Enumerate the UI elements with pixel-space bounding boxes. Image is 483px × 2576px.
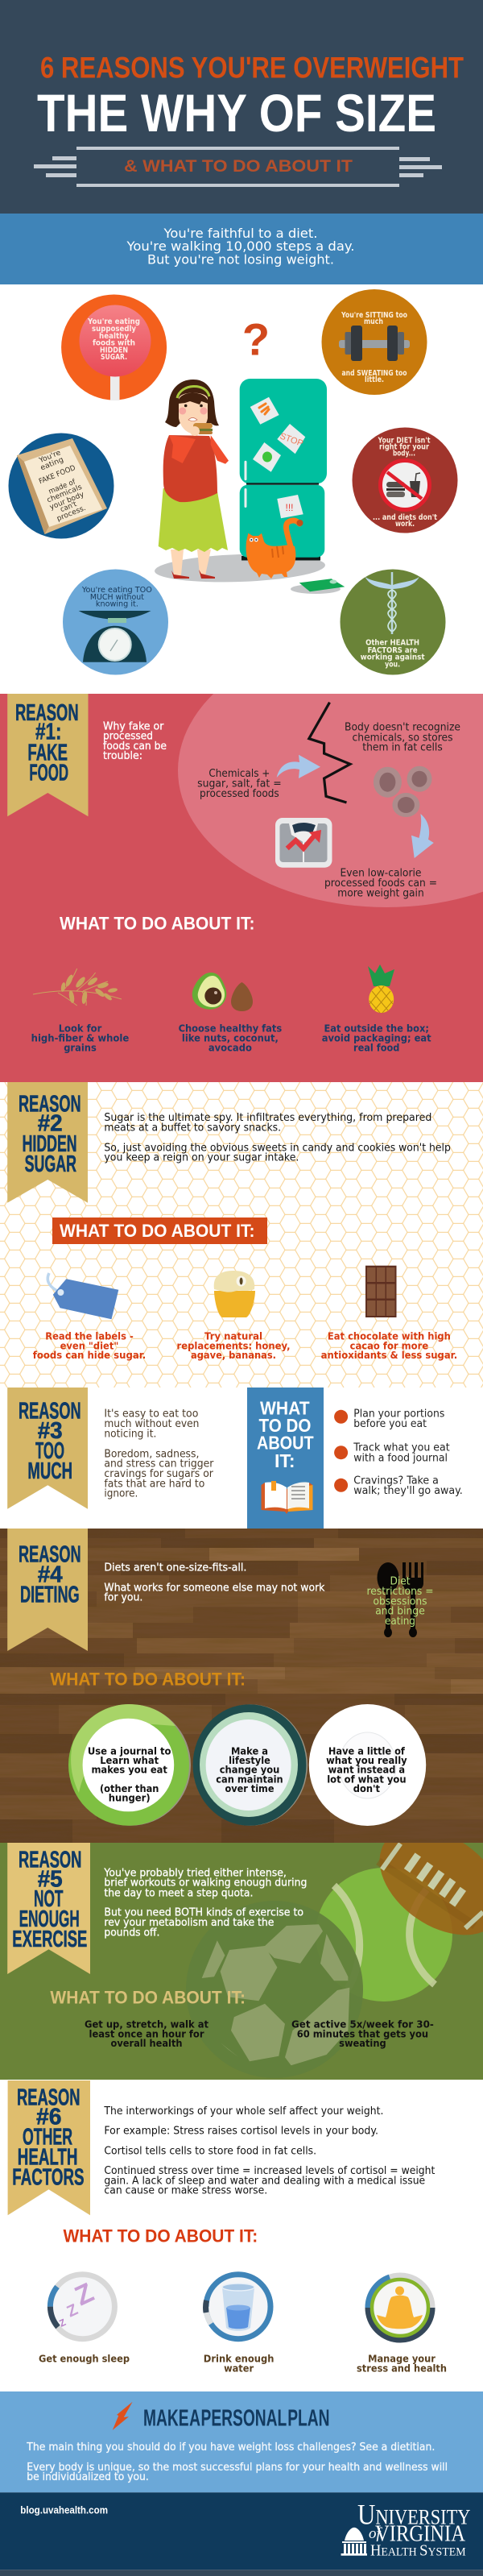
circle: moderation tip: lot of what you	[327, 1773, 407, 1785]
icon: sleep	[50, 2275, 114, 2339]
highlight ellipse	[178, 694, 483, 907]
text: exercise explanation	[103, 1866, 307, 1939]
ribbon: reason 5: ENOUGH	[19, 1906, 80, 1932]
ribbon: reason 1: FOOD	[29, 760, 68, 786]
illustration: orange cat	[246, 520, 303, 579]
circle: eating too much scale: knowing it.	[96, 600, 138, 609]
list: action bullets: walk; they'll go away.	[353, 1484, 463, 1497]
text: diets explanation	[104, 1561, 325, 1604]
tip text: get up and walk: overall health	[111, 2037, 182, 2049]
text: sugar explanation: meats at a buffet to savory snacks.	[104, 1121, 281, 1134]
text: chemicals equation: processed foods	[200, 787, 279, 800]
circle: moderation tip: what you really	[326, 1754, 407, 1766]
panel: what to do column	[247, 1388, 324, 1529]
ribbon: reason 5: #5	[38, 1867, 63, 1893]
icon: wheat	[33, 969, 122, 1006]
panel: reason 5 not enough exercise	[0, 1843, 483, 2080]
list: action bullets: with a food journal	[353, 1451, 448, 1464]
tip text: whole grains: high-fiber & whole	[31, 1032, 129, 1044]
circle: diet not right: ... and diets don't	[373, 513, 437, 522]
intro text	[126, 226, 354, 267]
panel: what to do column: IT:	[275, 1450, 295, 1471]
logo: University of Virginia Health System: VIRGINIA	[375, 2521, 466, 2546]
circle: moderation tip: Have a little of	[328, 1744, 405, 1757]
tip text: natural replacements: Try natural	[204, 1330, 262, 1342]
panel: reason 4 dieting	[0, 1529, 483, 1843]
circle: diet not right	[353, 427, 457, 533]
tip text: real food: real food	[353, 1041, 399, 1053]
icon: spoon and fork	[377, 1562, 423, 1637]
circle: journal tip	[68, 1704, 191, 1826]
text: body stores chemicals: them in fat cells	[362, 741, 443, 754]
text: body stores chemicals	[345, 721, 460, 754]
ribbon: reason 1	[7, 694, 89, 816]
ribbon: reason 1: #1:	[35, 719, 61, 745]
circle: journal tip: makes you eat	[91, 1764, 167, 1776]
tip text: get up and walk: least once an hour for	[89, 2027, 204, 2039]
list: action bullets: Track what you eat	[353, 1441, 450, 1454]
ribbon: reason 3: TOO	[35, 1438, 64, 1464]
text: eating too much explanation: fats that are hard to	[104, 1477, 204, 1490]
tip text: healthy fats: Choose healthy fats	[179, 1023, 282, 1035]
text: eating too much explanation: Boredom, sadness,	[104, 1447, 199, 1460]
text: sugar explanation: Sugar is the ultimate spy. It infiltrates everything, from prepared	[104, 1111, 431, 1124]
circle: hidden sugar lollipop: healthy	[99, 332, 130, 341]
circle: sitting too much dumbbell: and SWEATING too	[341, 369, 407, 378]
tip text: read the labels: foods can hide sugar.	[33, 1349, 146, 1361]
circle: fake food bag: can't	[60, 500, 78, 514]
tip text: get up and walk	[85, 2018, 208, 2049]
panel: reason 6 other health factors	[0, 2080, 483, 2391]
zigzag: body outline	[309, 703, 350, 803]
icon: lightning bolt	[113, 2402, 133, 2430]
panel: what to do column: TO DO	[259, 1415, 311, 1436]
ribbon: reason 6: FACTORS	[12, 2164, 84, 2190]
text: eating too much explanation: ignore.	[104, 1487, 138, 1500]
circle: fake food bag: process.	[56, 504, 87, 523]
text: eating too much explanation: noticing it.	[104, 1427, 156, 1440]
text: diets explanation: What works for someone else may not work	[104, 1581, 325, 1594]
logo: University of Virginia Health System	[341, 2499, 471, 2560]
icon: honey jar	[214, 1271, 255, 1317]
text: diets explanation: for you.	[104, 1591, 142, 1604]
subtitle: and what to do about it: & WHAT TO DO ABOUT IT	[124, 157, 353, 176]
circle: lifestyle tip: change you	[220, 1764, 279, 1776]
tip text: sleep: Get enough sleep	[39, 2353, 130, 2365]
icon: meditation	[368, 2275, 432, 2340]
circle: hidden sugar lollipop	[61, 295, 167, 400]
text: sugar explanation	[104, 1111, 451, 1164]
icon: sleep: Z	[70, 2277, 98, 2312]
illustration: fridge with magnets: !!!	[285, 502, 294, 513]
heading: what to do: WHAT TO DO ABOUT IT:	[50, 1670, 246, 1690]
list: action bullets: Cravings? Take a	[353, 1475, 439, 1487]
circle: other health factors caduceus: you.	[385, 660, 400, 669]
arrow: chemicals to body	[277, 755, 320, 778]
text: why fake food is trouble: Why fake or	[103, 720, 164, 733]
wood background	[0, 1529, 483, 1843]
ribbon: reason 6: OTHER	[23, 2125, 72, 2151]
ribbon: reason 5	[7, 1843, 90, 1974]
ribbon: reason 6: REASON	[17, 2085, 80, 2111]
circle: fake food bag: eating	[39, 456, 65, 472]
panel: footer	[0, 2492, 483, 2576]
icon: fat cells	[374, 766, 431, 817]
text: sugar explanation: you keep a reign on your sugar intake.	[104, 1151, 299, 1164]
panel: reason 3 too much	[0, 1388, 483, 1529]
text: health factors explanation: can cause or make stress worse.	[104, 2184, 267, 2197]
circle: lifestyle tip: over time	[225, 1782, 274, 1794]
circle: hidden sugar lollipop: foods with	[93, 339, 135, 348]
tip text: real food: Eat outside the box;	[324, 1023, 429, 1035]
tip text: chocolate: cacao for more	[350, 1339, 428, 1351]
circle: eating too much scale	[63, 569, 168, 675]
intro text: But you're not losing weight.	[147, 251, 334, 267]
text: eating too much explanation: It's easy to eat too	[104, 1408, 198, 1421]
heading: what to do: WHAT TO DO ABOUT IT:	[63, 2225, 258, 2246]
circle: eating too much scale: You're eating TOO	[81, 586, 152, 595]
heading: what to do: WHAT TO DO ABOUT IT:	[50, 1988, 246, 2008]
icon: almond	[231, 982, 253, 1011]
circle: moderation tip	[309, 1704, 426, 1826]
text: low calorie foods	[324, 866, 437, 899]
circle: journal tip: Learn what	[100, 1754, 159, 1766]
tip text: natural replacements: replacements: honey,	[177, 1339, 290, 1351]
ribbon: reason 3	[7, 1388, 88, 1509]
text: exercise explanation: pounds off.	[104, 1926, 159, 1939]
circle: journal tip: (other than	[100, 1782, 159, 1794]
text: why fake food is trouble: foods can be	[103, 740, 167, 753]
circle: diet not right: right for your	[379, 442, 429, 451]
tip text: chocolate: Eat chocolate with high	[328, 1330, 451, 1342]
text: chemicals equation: sugar, salt, fat =	[197, 778, 282, 790]
tip text: stress: Manage your	[368, 2353, 436, 2365]
circle: lifestyle tip: Make a	[231, 1744, 268, 1757]
illustration: floor shadow	[154, 551, 326, 585]
icon: scale with rising arrow	[275, 818, 332, 868]
tip text: healthy fats	[179, 1023, 282, 1053]
panel: reason 1 fake food	[0, 694, 483, 1082]
text: see a dietitian: Every body is unique, so the most successful plans for your health and wellness will	[27, 2461, 448, 2474]
text: eating too much explanation: cravings for sugars or	[104, 1467, 213, 1480]
text: diet restrictions: obsessions	[374, 1595, 427, 1607]
tip text: water: Drink enough	[204, 2353, 274, 2365]
circle: fake food bag: You're	[37, 449, 63, 465]
text: exercise explanation: rev your metabolism and take the	[104, 1916, 274, 1929]
tip text: chocolate: antioxidants & less sugar.	[321, 1349, 457, 1361]
icon: tennis ball	[316, 1868, 452, 2001]
text: diet restrictions: and binge	[375, 1605, 425, 1618]
text: low calorie foods: more weight gain	[337, 886, 424, 899]
text: exercise explanation: the day to meet a step quota.	[104, 1886, 253, 1899]
logo: University of Virginia Health System: of	[369, 2525, 383, 2542]
icon: football	[377, 1843, 483, 1935]
text: eating too much explanation: and stress can trigger	[104, 1458, 214, 1471]
tip text: read the labels: Read the labels -	[45, 1330, 134, 1342]
icon: open book	[261, 1481, 312, 1514]
icon: sleep: Z	[64, 2300, 80, 2321]
circle: fake food bag	[8, 433, 114, 538]
icon: water glass	[206, 2275, 270, 2339]
logo: University of Virginia Health System: HEALTH SYSTEM	[370, 2542, 466, 2560]
circle: sitting too much dumbbell: You're SITTING too	[341, 311, 407, 320]
circle: fake food bag: made of	[47, 478, 77, 496]
text: body stores chemicals: chemicals, so stores	[353, 731, 452, 744]
text: low calorie foods: Even low-calorie	[340, 866, 422, 879]
tip text: natural replacements	[177, 1330, 290, 1361]
tip text: natural replacements: agave, bananas.	[191, 1349, 276, 1361]
question mark: ?	[242, 314, 270, 364]
tip text: whole grains: Look for	[59, 1023, 102, 1035]
panel: what to do column: WHAT	[260, 1397, 310, 1418]
text: eating too much explanation	[104, 1408, 214, 1500]
circle: hidden sugar lollipop: You're eating	[87, 317, 140, 326]
text: health factors explanation: Continued stress over time = increased levels of cortisol = weight	[104, 2164, 435, 2177]
ribbon: reason 2	[7, 1082, 88, 1203]
text: health factors explanation: gain. A lack of sleep and water and dealing with a medical issue	[104, 2174, 425, 2187]
text: exercise explanation: You've probably tried either intense,	[103, 1866, 287, 1879]
tip text: read the labels	[33, 1330, 146, 1361]
icon: blue label tag	[47, 1273, 118, 1319]
icon: chocolate bar	[365, 1266, 396, 1317]
circle: journal tip: hunger)	[109, 1792, 151, 1804]
tip text: chocolate	[321, 1330, 457, 1361]
panel: make a personal plan	[0, 2391, 483, 2492]
list: action bullets: before you eat	[353, 1417, 427, 1430]
tip text: water	[204, 2353, 274, 2374]
circle: moderation tip: don't	[353, 1782, 380, 1794]
panel: causes overview	[0, 284, 483, 694]
icon: sleep: Z	[57, 2317, 68, 2329]
circle: hidden sugar lollipop: HIDDEN	[100, 346, 128, 355]
icon: avocado	[192, 973, 226, 1010]
ribbon: reason 3: REASON	[19, 1398, 81, 1424]
text: exercise explanation: brief workouts or walking enough during	[104, 1877, 307, 1889]
ribbon: reason 4: DIETING	[20, 1583, 80, 1608]
ribbon: reason 2: #2	[38, 1111, 63, 1137]
tip text: healthy fats: avocado	[208, 1041, 252, 1053]
circle: sitting too much dumbbell: much	[364, 317, 383, 326]
heading: what to do: WHAT TO DO ABOUT IT:	[60, 913, 254, 933]
illustration: fridge with magnets	[240, 379, 327, 561]
text: see a dietitian: The main thing you should do if you have weight loss challenges? See a dietitian.	[26, 2441, 435, 2454]
subtitle frame with speed lines	[34, 147, 442, 187]
panel: reason 2 hidden sugar	[0, 1082, 483, 1388]
icon: pineapple	[368, 964, 394, 1013]
text: health factors explanation: The interworkings of your whole self affect your weight.	[103, 2105, 383, 2118]
ribbon: reason 2: SUGAR	[25, 1151, 76, 1177]
circle: diet not right: Your DIET isn't	[378, 436, 431, 445]
circle: journal tip: Use a journal to	[88, 1744, 171, 1757]
circle: other health factors caduceus: working against	[361, 653, 425, 662]
list: action bullets: Plan your portions	[353, 1408, 444, 1421]
circle: other health factors caduceus: FACTORS are	[368, 646, 418, 655]
circle: diet not right: body...	[393, 449, 415, 458]
text: why fake food is trouble	[103, 720, 167, 762]
tip text: real food	[322, 1023, 431, 1053]
text: health factors explanation	[103, 2105, 435, 2197]
ribbon: reason 6	[8, 2080, 90, 2215]
illustration: fridge with magnets: STOP	[279, 431, 304, 449]
circle: other health factors caduceus: Other HEALTH	[365, 639, 419, 648]
tip text: get active	[291, 2018, 434, 2049]
ribbon: reason 1: FAKE	[27, 740, 68, 765]
logo: University of Virginia Health System: UNIVERSITY	[357, 2499, 471, 2531]
ribbon: reason 2: HIDDEN	[23, 1131, 77, 1157]
tip text: whole grains: grains	[64, 1041, 97, 1053]
ribbon: reason 3: #3	[38, 1418, 63, 1444]
tip text: get active: sweating	[339, 2037, 386, 2049]
circle: hidden sugar lollipop: supposedly	[92, 325, 137, 334]
circle: sitting too much dumbbell	[322, 289, 427, 395]
list: action bullets	[334, 1408, 463, 1497]
tip text: stress: stress and health	[357, 2362, 447, 2374]
sports balls illustration	[201, 1843, 483, 2066]
circle: lifestyle tip	[193, 1704, 308, 1826]
heading: make a personal plan: MAKE A PERSONAL PLAN	[143, 2406, 330, 2432]
text: low calorie foods: processed foods can =	[324, 877, 437, 890]
text: health factors explanation: Cortisol tells cells to store food in fat cells.	[104, 2144, 316, 2157]
ribbon: reason 1: REASON	[15, 700, 79, 726]
text: chemicals equation	[197, 767, 282, 800]
ribbon: reason 5: REASON	[19, 1847, 81, 1873]
ribbon: reason 3: MUCH	[27, 1458, 72, 1484]
text: diets explanation: Diets aren't one-size-fits-all.	[104, 1561, 246, 1574]
circle: eating too much scale: MUCH without	[90, 593, 144, 602]
text: body stores chemicals: Body doesn't recognize	[345, 721, 460, 734]
ribbon: reason 4: #4	[38, 1562, 63, 1588]
panel: what to do column: ABOUT	[257, 1433, 314, 1454]
text: why fake food is trouble: processed	[103, 730, 153, 743]
tip text: get up and walk: Get up, stretch, walk at	[85, 2018, 208, 2031]
tip text: read the labels: even "diet"	[60, 1339, 118, 1351]
circle: sitting too much dumbbell: little.	[365, 375, 384, 384]
circle: fake food bag: chemicals	[46, 483, 84, 504]
text: eating too much explanation: much without even	[104, 1417, 199, 1430]
intro text: You're faithful to a diet.	[163, 226, 317, 241]
ribbon: reason 5: EXERCISE	[12, 1927, 87, 1952]
ribbon: reason 5: NOT	[34, 1886, 64, 1912]
text: see a dietitian: be individualized to you.	[27, 2470, 149, 2483]
circle: other health factors caduceus	[340, 569, 446, 675]
tip text: stress	[357, 2353, 447, 2374]
circle: moderation tip: want instead a	[328, 1764, 405, 1776]
ribbon: reason 6: HEALTH	[18, 2144, 77, 2170]
text: chemicals equation: Chemicals +	[208, 767, 270, 780]
footer url: blog.uvahealth.com	[20, 2504, 108, 2516]
tip text: healthy fats: like nuts, coconut,	[182, 1032, 279, 1044]
ribbon: reason 2: REASON	[19, 1091, 81, 1117]
tip text: water: water	[224, 2362, 254, 2374]
illustration: woman eating a burger	[159, 380, 229, 579]
circle: fake food bag: your body	[49, 491, 86, 512]
circle: lifestyle tip: lifestyle	[229, 1754, 270, 1766]
panel: intro band	[0, 214, 483, 284]
icon: soccer ball	[201, 1913, 363, 2066]
illustration: bathroom scale	[291, 579, 345, 594]
text: diet restrictions: restrictions =	[367, 1585, 433, 1598]
text: sugar explanation: So, just avoiding the obvious sweets in candy and cookies won't help	[104, 1141, 451, 1154]
tip text: real food: avoid packaging; eat	[322, 1032, 431, 1044]
panel: header	[0, 0, 483, 214]
arrow: cells to weight gain	[411, 814, 434, 858]
text: diet restrictions	[367, 1575, 433, 1628]
text: diet restrictions: eating	[385, 1615, 415, 1628]
circle: fake food bag: FAKE FOOD	[38, 464, 76, 486]
text: why fake food is trouble: trouble:	[103, 749, 142, 762]
tip text: whole grains	[31, 1023, 129, 1053]
text: exercise explanation: But you need BOTH kinds of exercise to	[104, 1906, 303, 1919]
heading: what to do bar: WHAT TO DO ABOUT IT:	[60, 1221, 254, 1241]
ribbon: reason 6: #6	[36, 2105, 61, 2130]
text: diet restrictions: Diet	[390, 1575, 411, 1588]
text: health factors explanation: For example: Stress raises cortisol levels in your body.	[104, 2125, 378, 2138]
intro text: You're walking 10,000 steps a day.	[126, 239, 354, 254]
icon: rotunda	[341, 2528, 367, 2556]
circle: diet not right: work.	[395, 520, 415, 529]
tip text: get active: Get active 5x/week for 30-	[291, 2018, 434, 2031]
text: see a dietitian	[26, 2441, 448, 2483]
circle: hidden sugar lollipop: SUGAR.	[101, 353, 127, 362]
ribbon: reason 4: REASON	[19, 1542, 81, 1568]
ribbon: reason 4	[7, 1529, 88, 1651]
circle: lifestyle tip: can maintain	[216, 1773, 283, 1785]
tip text: get active: 60 minutes that gets you	[297, 2027, 428, 2039]
